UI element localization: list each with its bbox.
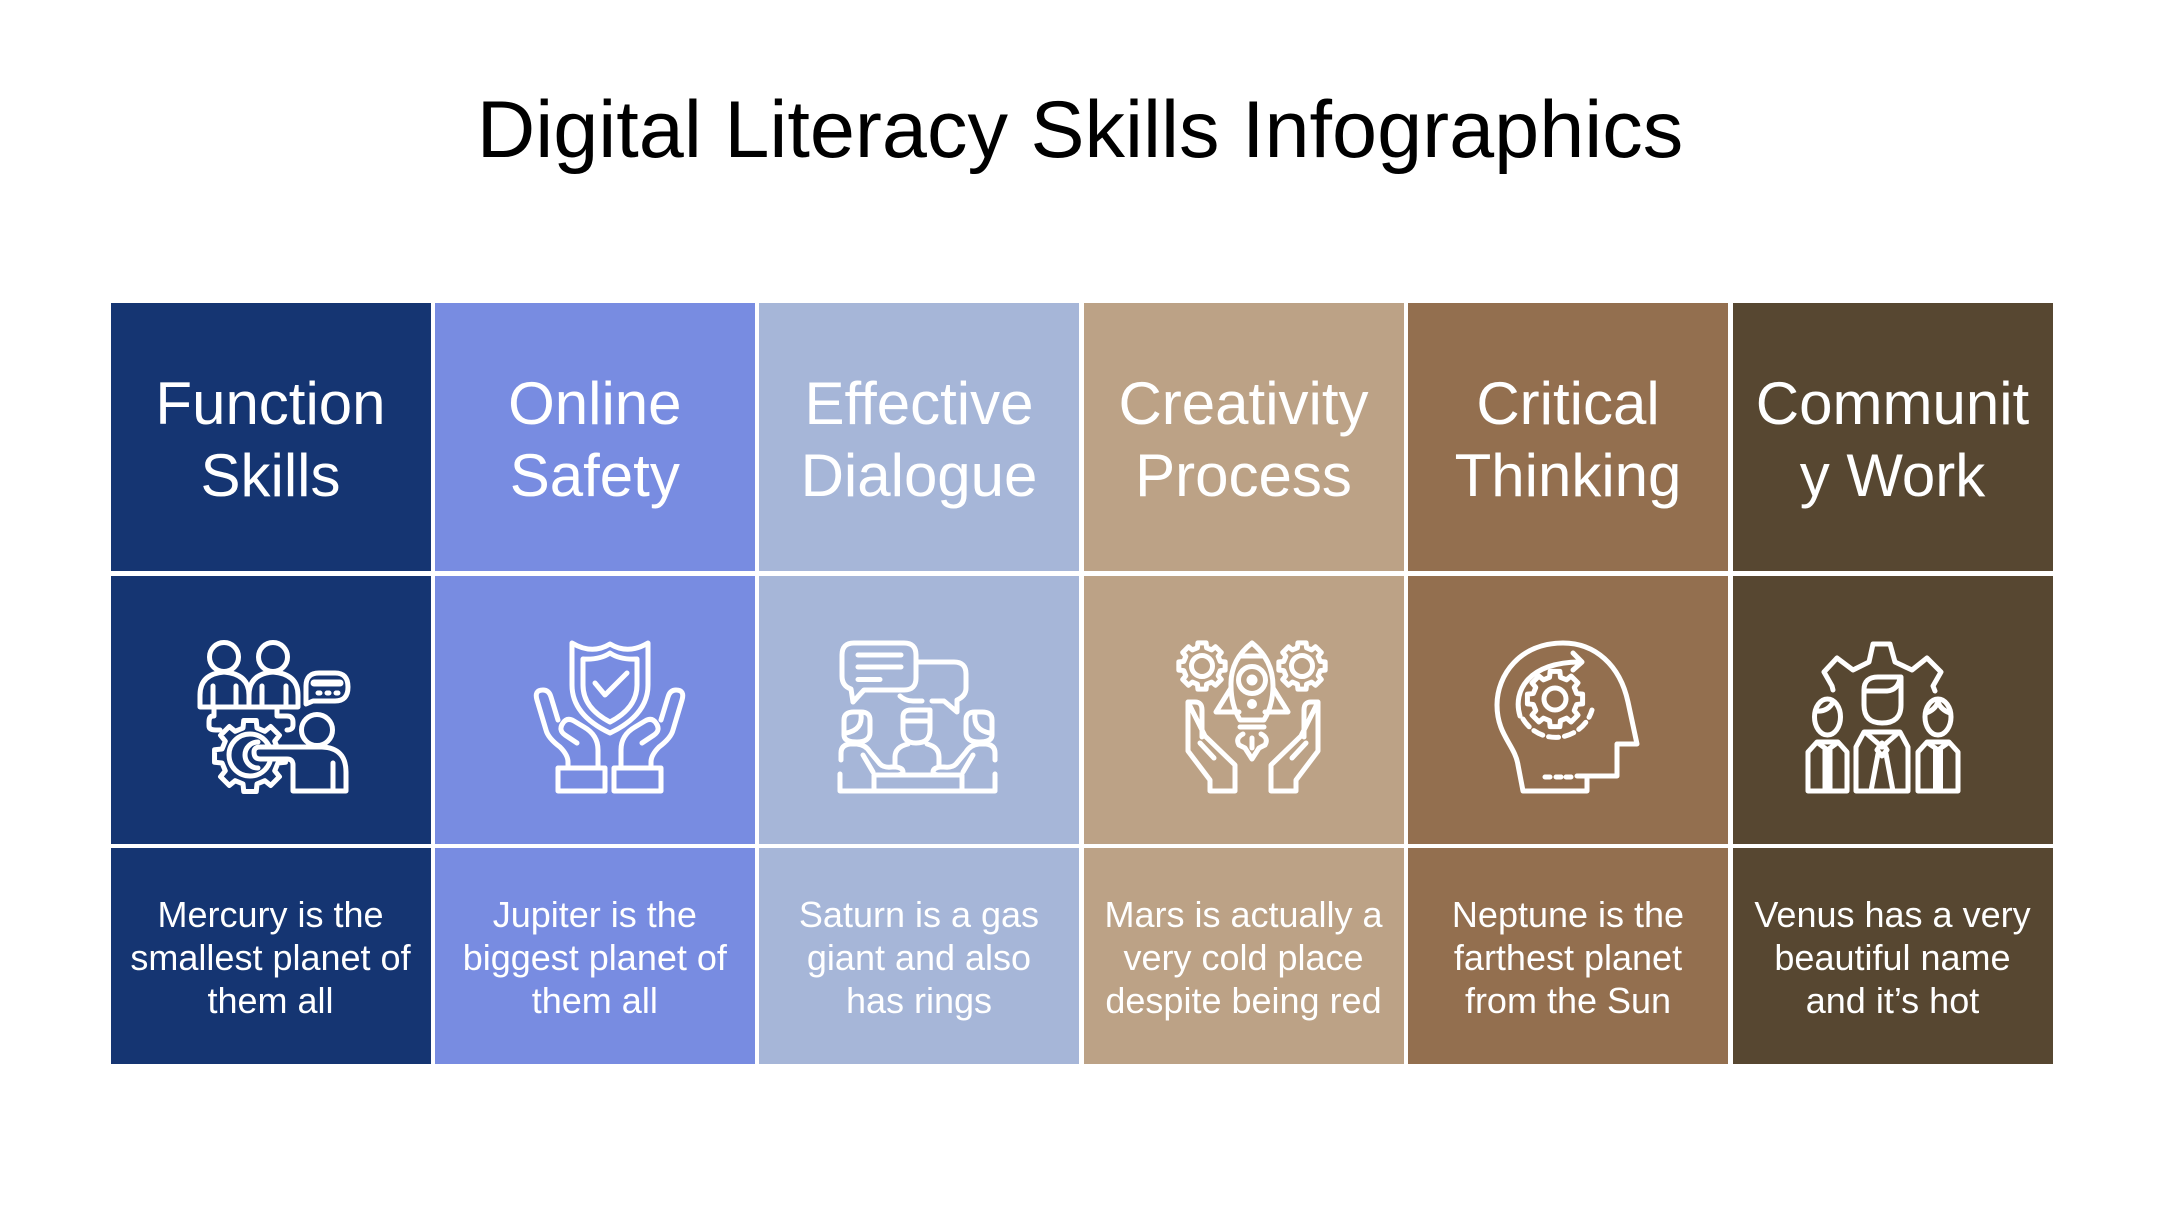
heading: Online Safety — [435, 303, 755, 570]
description: Mars: Mars is actually a — [1104, 894, 1383, 934]
description: Neptune — [1408, 848, 1728, 1064]
heading: Creativity Process: Creativity — [1118, 370, 1369, 437]
description: Mars: despite being red — [1105, 980, 1382, 1021]
description: Saturn: giant and also — [807, 937, 1031, 978]
heading: Effective Dialogue: Dialogue — [801, 442, 1037, 509]
icon: team under gear — [1806, 642, 1960, 794]
panel: Function Skills — [111, 303, 431, 1064]
heading: Effective Dialogue: Effective — [804, 370, 1034, 437]
icon: rocket with gears and hands — [1176, 640, 1328, 794]
description: Mercury: Mercury is the — [157, 894, 384, 934]
heading: Creativity Process: Process — [1135, 442, 1352, 509]
heading: Critical Thinking — [1408, 303, 1728, 570]
description: Jupiter — [435, 848, 755, 1064]
description: Venus: beautiful name — [1774, 937, 2011, 978]
heading: Community Work: Communit — [1756, 370, 2029, 437]
icon: group conversation — [838, 640, 998, 794]
description: Mars: very cold place — [1123, 937, 1364, 978]
heading: Effective Dialogue — [759, 303, 1079, 570]
panel: Critical Thinking — [1408, 303, 1728, 1064]
heading: Function Skills — [110, 303, 430, 570]
description: Saturn: has rings — [846, 980, 992, 1021]
description: Jupiter: Jupiter is the — [493, 894, 697, 934]
icon: shield in hands — [534, 640, 686, 794]
panel: Creativity Process — [1084, 303, 1404, 1064]
heading: Creativity Process — [1084, 303, 1404, 570]
description: Neptune: from the Sun — [1465, 980, 1671, 1021]
icon cell background: Creativity Process — [1084, 576, 1404, 844]
description: Mercury — [110, 848, 430, 1064]
description: Jupiter: them all — [532, 980, 658, 1021]
title: Digital Literacy Skills Infographics — [477, 85, 1683, 175]
heading: Online Safety: Safety — [510, 442, 680, 509]
description: Neptune: farthest planet — [1454, 937, 1682, 978]
icon cell background: Critical Thinking — [1408, 576, 1728, 844]
icon: team and gear — [198, 640, 350, 794]
description: Venus — [1732, 848, 2052, 1064]
heading: Function Skills: Skills — [200, 442, 340, 509]
description: Neptune: Neptune is the — [1452, 894, 1684, 934]
description: Jupiter: biggest planet of — [463, 937, 727, 978]
description: Saturn — [759, 848, 1079, 1064]
description: Venus: and it’s hot — [1806, 980, 1979, 1021]
icon: head with gear — [1494, 640, 1640, 794]
description: Saturn: Saturn is a gas — [799, 894, 1039, 934]
description: Mercury: smallest planet of — [130, 937, 411, 978]
heading: Function Skills: Function — [155, 370, 386, 437]
icon cell background: Online Safety — [435, 576, 755, 844]
heading: Critical Thinking: Thinking — [1455, 442, 1681, 509]
heading: Critical Thinking: Critical — [1476, 370, 1660, 437]
description: Mars — [1084, 848, 1404, 1064]
panel: Effective Dialogue — [759, 303, 1079, 1064]
heading: Community Work — [1732, 303, 2052, 570]
panel: Community Work — [1733, 303, 2053, 1064]
icon cell background: Community Work — [1732, 576, 2052, 844]
icon cell background: Function Skills — [110, 576, 430, 844]
description: Venus: Venus has a very — [1754, 894, 2031, 934]
description: Mercury: them all — [207, 980, 334, 1021]
heading: Community Work: y Work — [1800, 442, 1985, 509]
heading: Online Safety: Online — [508, 370, 682, 437]
icon cell background: Effective Dialogue — [759, 576, 1079, 844]
panel: Online Safety — [435, 303, 755, 1064]
